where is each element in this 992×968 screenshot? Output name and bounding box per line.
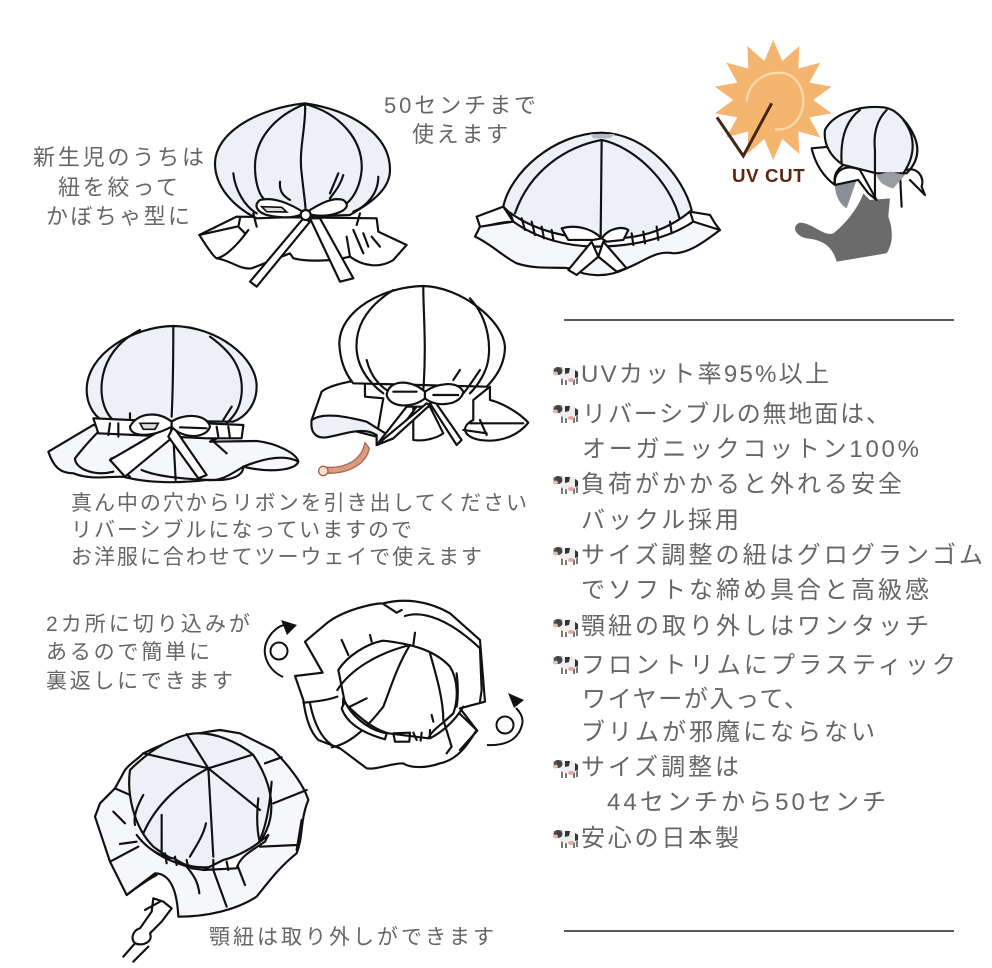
caption: reversible: リバーシブルになっていますので [71, 519, 412, 542]
hat illustration: open brim with ruffle [475, 40, 925, 275]
feature: size [581, 754, 886, 816]
feature: size cord [581, 542, 983, 604]
icon: cow [553, 476, 579, 494]
caption: two cuts: あるので簡単に [46, 641, 210, 664]
caption: reversible: 真ん中の穴からリボンを引き出してください [71, 492, 527, 515]
caption: removable chin strap: 顎紐は取り外しができます [209, 926, 494, 949]
icon: cow [553, 367, 579, 385]
icon: cow [553, 760, 579, 778]
caption: newborn pumpkin shape: かぼちゃ型に [46, 204, 190, 229]
caption: up to 50 cm [384, 93, 536, 147]
sun [715, 40, 832, 160]
caption: reversible: お洋服に合わせてツーウェイで使えます [71, 546, 482, 569]
caption: two cuts: 裏返しにできます [46, 670, 233, 693]
icon: cow [553, 830, 579, 848]
caption: newborn pumpkin shape [33, 145, 204, 229]
caption: up to 50 cm: 50センチまで [384, 93, 536, 118]
hat illustration: pumpkin shape with bow [199, 103, 407, 287]
caption: newborn pumpkin shape: 紐を絞って [58, 175, 178, 200]
feature: reversible [582, 401, 919, 463]
caption: two cuts: 2カ所に切り込みが [46, 613, 250, 636]
feature: wire: ワイヤーが入って、 [582, 686, 808, 713]
caption: two cuts [46, 613, 250, 693]
feature: reversible: リバーシブルの無地面は、 [582, 401, 890, 428]
caption: up to 50 cm: 使えます [412, 122, 508, 147]
icon: cow [553, 547, 579, 565]
feature: wire [581, 652, 956, 746]
feature: buckle [581, 471, 902, 534]
caption: reversible [71, 492, 527, 569]
feature: size cord: でソフトな締め具合と高級感 [581, 577, 929, 604]
feature: size cord: サイズ調整の紐はグログランゴム [581, 542, 983, 569]
feature list [553, 361, 983, 852]
icon: cow [553, 656, 579, 674]
feature: wire: ブリムが邪魔にならない [581, 719, 875, 746]
icon: cow [553, 619, 579, 637]
UV CUT label: UV CUT [732, 165, 805, 186]
hat illustration: gathered back view [311, 286, 528, 476]
feature: buckle: バックル採用 [581, 507, 739, 534]
icon: cow [553, 405, 579, 423]
feature: chin strap: 顎紐の取り外しはワンタッチ [581, 613, 929, 640]
feature: wire: フロントリムにプラスティック [581, 652, 956, 679]
arrow: left rotation [265, 620, 297, 677]
baby wearing hat [795, 107, 925, 262]
hat illustration: turning inside out [295, 601, 485, 769]
arrow: right rotation [487, 693, 524, 745]
feature: buckle: 負荷がかかると外れる安全 [581, 471, 902, 498]
chin strap [123, 898, 172, 962]
feature: size: サイズ調整は [581, 754, 739, 781]
caption: newborn pumpkin shape: 新生児のうちは [33, 145, 204, 170]
feature: reversible: オーガニックコットン100% [582, 436, 919, 463]
check mark [717, 103, 772, 156]
hat illustration: inside view with chin strap [95, 730, 308, 962]
feature: UV: UVカット率95%以上 [581, 361, 829, 388]
hat illustration: wide brim with bow [48, 286, 528, 482]
feature: made in Japan: 安心の日本製 [581, 825, 739, 852]
feature: size: 44センチから50センチ [607, 789, 886, 816]
pull ribbon [319, 443, 369, 476]
